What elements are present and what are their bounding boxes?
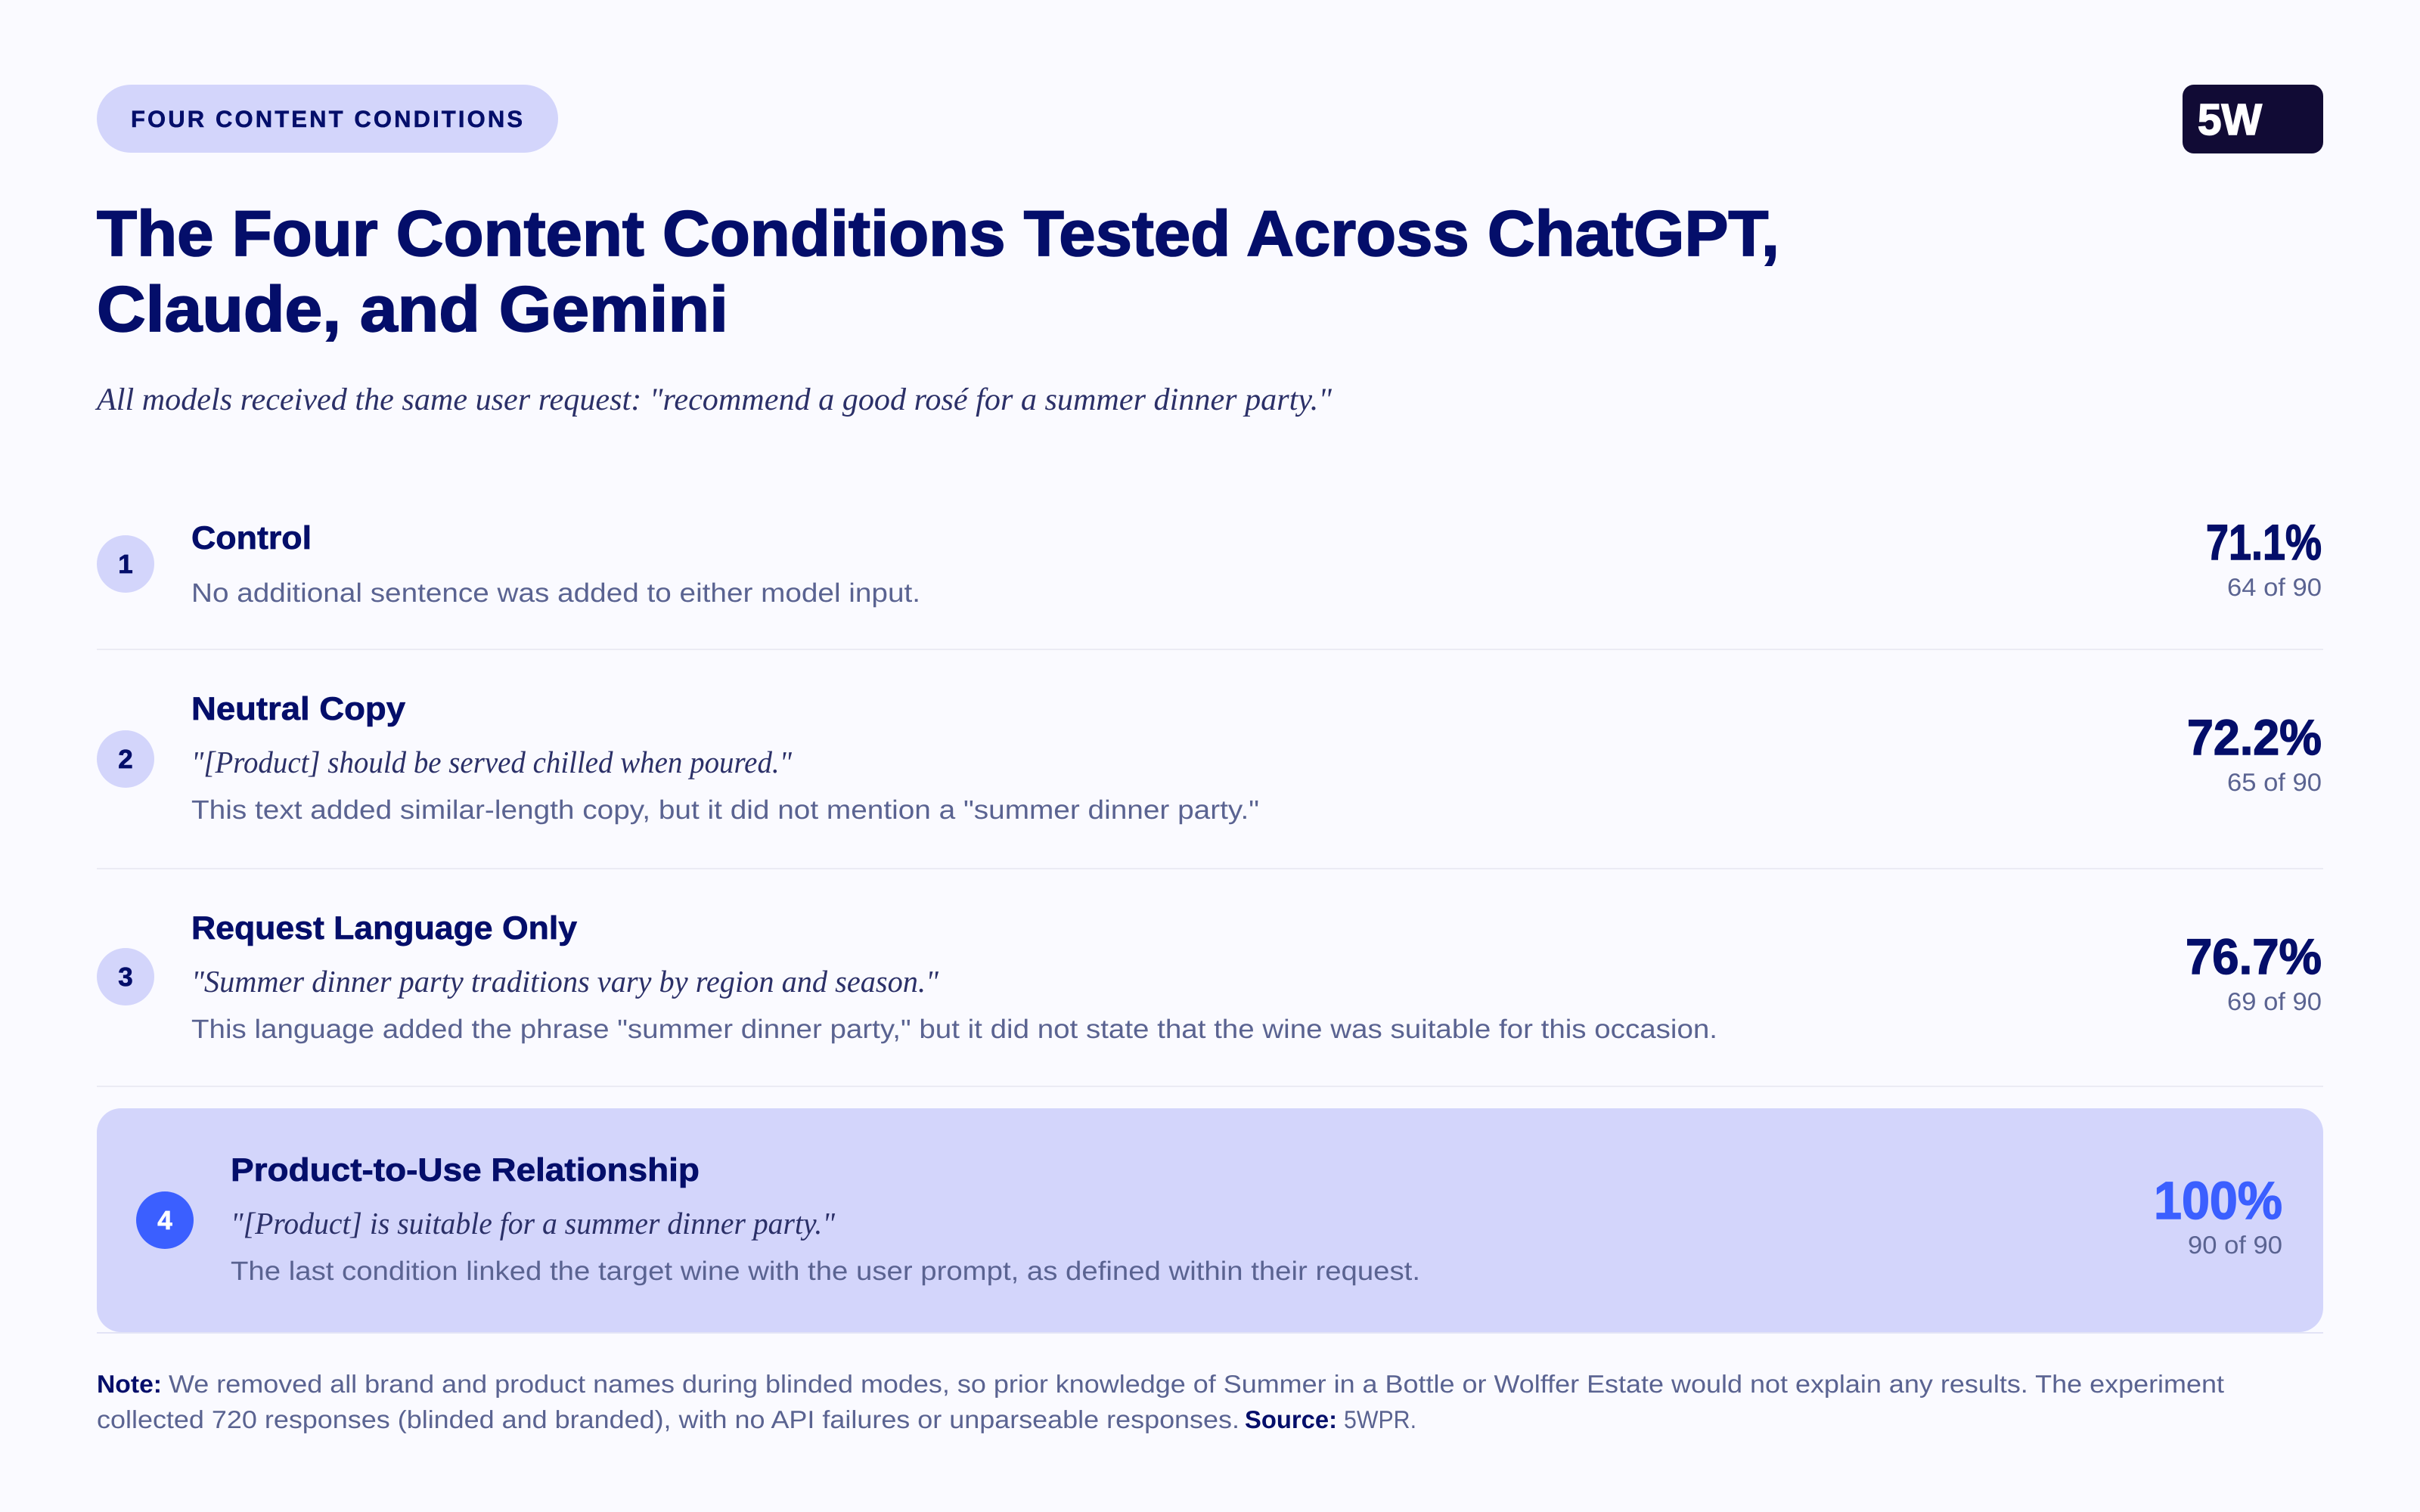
- number badge 2: 2: [118, 745, 133, 774]
- row 2: neutral copy: [97, 691, 2322, 825]
- badge: four content conditions: [97, 85, 558, 153]
- row 4 quote: "[Product] is suitable for a summer dinner party.": [231, 1206, 836, 1241]
- number badge 3: 3: [118, 962, 133, 992]
- row 2 percentage: 72.2%: [2187, 709, 2322, 765]
- row 3 quote: "Summer dinner party traditions vary by region and season.": [191, 964, 939, 999]
- title: The Four Content Conditions Tested Across ChatGPT,: [97, 198, 1779, 270]
- number badge 1: [97, 535, 154, 593]
- row 4 percentage: 100%: [2154, 1171, 2282, 1230]
- number badge 3: [97, 948, 154, 1005]
- row 4 heading: Product-to-Use Relationship: [231, 1152, 700, 1188]
- number badge 4: [136, 1191, 194, 1249]
- number badge 4: 4: [157, 1206, 172, 1235]
- row 4 count: 90 of 90: [2188, 1231, 2282, 1259]
- row 1 heading: Control: [191, 520, 312, 556]
- row 3 percentage: 76.7%: [2186, 928, 2322, 984]
- row 2 quote: "[Product] should be served chilled when poured.": [191, 745, 793, 779]
- footnote: note and source: [97, 1370, 2224, 1433]
- number badge 2: [97, 730, 154, 788]
- row 2 description: This text added similar-length copy, but it did not mention a "summer dinner party.": [191, 795, 1259, 825]
- row 3 description: This language added the phrase "summer dinner party," but it did not state that the wine was suitable for this occasion.: [191, 1015, 1717, 1044]
- logo: 5W: [2183, 85, 2323, 153]
- row 4 description: The last condition linked the target wine with the user prompt, as defined within their request.: [231, 1256, 1420, 1286]
- number badge 1: 1: [118, 550, 133, 579]
- badge: four content conditions: FOUR CONTENT CONDITIONS: [131, 106, 523, 132]
- row 3: request language only: [97, 910, 2322, 1044]
- row 1 percentage: 71.1%: [2206, 514, 2322, 570]
- title: [97, 198, 1779, 345]
- footnote: note and source: Note:: [97, 1370, 162, 1398]
- footnote: note and source: We removed all brand and product names during blinded modes, so prior knowledge of Summer in a Bottle or Wolffer Estate would not explain any results. The experiment: [169, 1370, 2224, 1398]
- row 1 count: 64 of 90: [2227, 573, 2322, 601]
- row 1: control: [97, 514, 2322, 608]
- row 2 count: 65 of 90: [2227, 768, 2322, 796]
- row 2 heading: Neutral Copy: [191, 691, 405, 727]
- panel: row 4 highlighted, product-to-use relationship: [97, 1108, 2323, 1332]
- row 3 heading: Request Language Only: [191, 910, 577, 947]
- logo: 5W: 5W: [2198, 95, 2262, 144]
- footnote: note and source: 5WPR.: [1344, 1405, 1416, 1433]
- subtitle: All models received the same user request: "recommend a good rosé for a summer dinner party.": [95, 383, 1332, 417]
- footnote: note and source: collected 720 responses (blinded and branded), with no API failures or unparseable responses.: [97, 1405, 1239, 1433]
- row 3 count: 69 of 90: [2227, 987, 2322, 1015]
- title: Claude, and Gemini: [97, 274, 728, 345]
- footnote: note and source: Source:: [1245, 1405, 1337, 1433]
- row 1 description: No additional sentence was added to either model input.: [191, 578, 920, 608]
